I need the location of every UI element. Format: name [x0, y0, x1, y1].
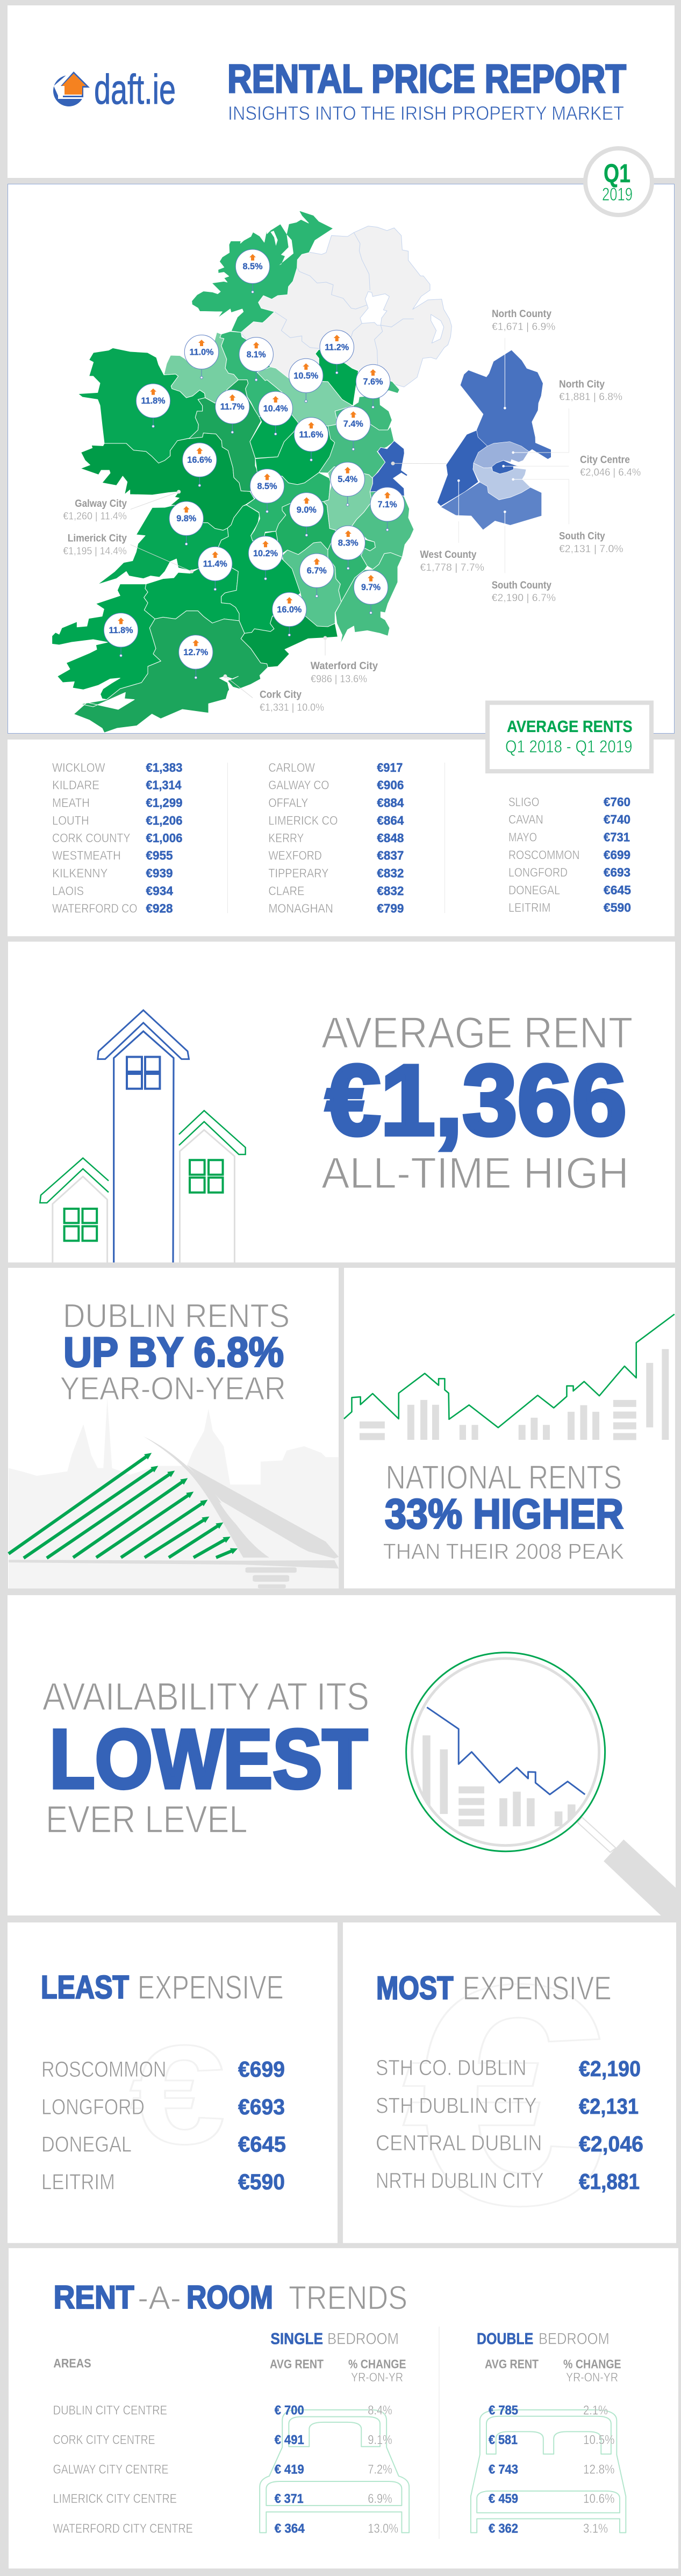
table column 1: LOUTH — [52, 813, 89, 827]
table rows: rent-a-room by city — [53, 2403, 614, 2536]
illustration: Dublin skyline — [9, 1398, 339, 1588]
icon: euro watermark: € — [402, 1919, 608, 2270]
table column 1: €1,006 — [146, 831, 183, 845]
map bubbles: percentage change by county: 11.8% — [141, 396, 166, 406]
table rows: rent-a-room by city: 10.6% — [583, 2492, 614, 2506]
table column 1: €1,383 — [146, 760, 183, 774]
map bubbles: percentage change by county: 10.4% — [263, 403, 288, 414]
table column 1: MEATH — [52, 795, 90, 809]
map labels: cities and Dublin areas: €1,260 | 11.4% — [63, 511, 127, 522]
inset: City Centre — [492, 461, 520, 474]
list: least expensive areas: LEITRIM — [41, 2169, 115, 2194]
table header: double bedroom: DOUBLE — [477, 2330, 533, 2348]
icon: single bed outline — [260, 2410, 409, 2532]
table rows: rent-a-room by city: DUBLIN CITY CENTRE — [53, 2403, 167, 2418]
table column 2: LIMERICK CO — [268, 813, 338, 827]
map bubbles: percentage change by county: 10.5% — [293, 371, 318, 381]
map bubbles: percentage change by county: 12.7% — [183, 647, 208, 657]
table column 2: TIPPERARY — [268, 866, 328, 880]
map bubbles: percentage change by county: 11.8% — [109, 625, 133, 635]
table column 1: WESTMEATH — [52, 849, 121, 863]
list: least expensive areas: DONEGAL — [41, 2132, 132, 2157]
badge: Q1 2019: 2019 — [602, 184, 633, 205]
table column 2: €917 — [377, 760, 403, 774]
table column 3: €760 — [604, 795, 630, 809]
text: lowest: LOWEST — [49, 1712, 368, 1806]
table rows: rent-a-room by city: 3.1% — [583, 2521, 608, 2536]
table column 1: €955 — [146, 849, 173, 863]
map labels: cities and Dublin areas: South City — [559, 531, 605, 542]
list: most expensive areas: STH DUBLIN CITY — [376, 2093, 537, 2118]
list: most expensive areas: NRTH DUBLIN CITY — [376, 2168, 544, 2193]
map bubbles: percentage change by county: 10.2% — [253, 548, 278, 558]
table rows: rent-a-room by city: € 700 — [275, 2403, 304, 2418]
table column 3: €645 — [604, 883, 631, 897]
heading: rent-a-room trends: -A- — [138, 2279, 181, 2316]
map labels: cities and Dublin areas — [63, 308, 641, 714]
table column 2: €906 — [377, 778, 404, 792]
map labels: cities and Dublin areas: Limerick City — [68, 533, 127, 544]
table column 3: DONEGAL — [508, 883, 560, 897]
map labels: cities and Dublin areas: North County — [492, 308, 551, 320]
map labels: cities and Dublin areas: €1,195 | 14.4% — [63, 546, 127, 557]
table column 3: CAVAN — [508, 813, 543, 827]
table column 1: WICKLOW — [52, 760, 105, 774]
table rows: rent-a-room by city: CORK CITY CENTRE — [53, 2433, 155, 2447]
table column 2: GALWAY CO — [268, 778, 329, 792]
left house — [40, 1158, 109, 1262]
table column 3 — [508, 795, 631, 915]
table rows: rent-a-room by city: LIMERICK CITY CENTRE — [53, 2492, 177, 2506]
map bubbles: percentage change by county: 16.6% — [187, 455, 212, 465]
table column 2: €832 — [377, 884, 404, 898]
heading: least expensive — [41, 1969, 284, 2006]
map: Mayo — [78, 348, 205, 463]
list: least expensive areas: LONGFORD — [41, 2094, 145, 2119]
table column 1: €928 — [146, 901, 173, 915]
map labels: cities and Dublin areas: €2,131 | 7.0% — [559, 543, 623, 555]
map bubbles: percentage change by county: 11.2% — [325, 342, 349, 353]
text: national rents: NATIONAL RENTS — [386, 1459, 622, 1496]
table column 2: KERRY — [268, 831, 304, 845]
table header: single bedroom: BEDROOM — [327, 2330, 399, 2348]
list: least expensive areas: €645 — [238, 2132, 286, 2157]
table column 2: €799 — [377, 901, 404, 915]
table column 1: CORK COUNTY — [52, 831, 130, 845]
table rows: rent-a-room by city: € 491 — [275, 2433, 304, 2447]
table rows: rent-a-room by city: WATERFORD CITY CENTRE — [53, 2521, 193, 2536]
text: year-on-year: YEAR-ON-YEAR — [60, 1370, 286, 1407]
text: Dublin rents: DUBLIN RENTS — [63, 1297, 290, 1334]
panel: average rents table — [8, 740, 675, 936]
table rows: rent-a-room by city: 2.1% — [583, 2403, 608, 2418]
icon: euro watermark: € — [130, 2016, 226, 2173]
table column 3: SLIGO — [508, 795, 539, 809]
table column headers: % CHANGE — [563, 2357, 621, 2371]
map bubbles: percentage change by county: 7.1% — [378, 499, 397, 510]
inset: North County — [461, 350, 551, 459]
table rows: rent-a-room by city: GALWAY CITY CENTRE — [53, 2462, 168, 2477]
map bubbles: percentage change by county: 8.3% — [338, 537, 359, 548]
list: most expensive areas: €1,881 — [579, 2169, 640, 2194]
table rows: rent-a-room by city: 9.1% — [368, 2433, 392, 2447]
table column 3: €693 — [604, 865, 630, 879]
map: Northern Ireland — [241, 226, 451, 387]
table column 2: CARLOW — [268, 760, 315, 774]
inset: West County — [437, 430, 488, 506]
table column 1: KILDARE — [52, 778, 99, 792]
table header: double bedroom — [477, 2330, 610, 2348]
heading: rent-a-room trends — [54, 2279, 407, 2316]
table column 1: €1,206 — [146, 813, 183, 827]
table column 2: OFFALY — [268, 795, 308, 809]
heading: rent-a-room trends: ROOM — [187, 2279, 273, 2315]
badge: Q1 2019 — [585, 148, 652, 215]
list: most expensive areas: CENTRAL DUBLIN — [376, 2130, 542, 2155]
list: most expensive areas: STH CO. DUBLIN — [376, 2055, 526, 2080]
map bubbles: percentage change by county: 6.7% — [307, 565, 327, 576]
list: most expensive areas: €2,190 — [579, 2056, 641, 2081]
illustration: Samuel Beckett bridge — [9, 1437, 339, 1588]
map: Donegal and northern counties — [192, 211, 333, 332]
table column 1: LAOIS — [52, 884, 84, 898]
table column 1: €934 — [146, 884, 173, 898]
map labels: cities and Dublin areas: Cork City — [260, 689, 302, 700]
text: than their 2008 peak: THAN THEIR 2008 PEAK — [383, 1539, 624, 1563]
text: average rent: AVERAGE RENT — [321, 1008, 633, 1057]
map bubbles: percentage change by county: 8.5% — [257, 481, 277, 491]
list: least expensive areas: €590 — [238, 2169, 285, 2194]
heading: most expensive — [376, 1970, 612, 2007]
table rows: rent-a-room by city: € 419 — [275, 2462, 304, 2477]
map bubbles: percentage change by county: 9.0% — [297, 505, 317, 515]
table rows: rent-a-room by city: € 362 — [489, 2521, 518, 2536]
heading: rent-a-room trends: RENT — [54, 2279, 134, 2315]
panel: least expensive — [8, 1922, 338, 2243]
map labels: cities and Dublin areas: West County — [420, 549, 477, 561]
table column 2: €832 — [377, 866, 404, 880]
table column 1: €939 — [146, 866, 173, 880]
table column 1 — [52, 760, 183, 915]
panel: national rents — [344, 1268, 675, 1589]
panel: most expensive — [343, 1919, 676, 2270]
inset: leader lines — [457, 338, 569, 573]
icon: magnifying glass — [406, 1653, 677, 1915]
table rows: rent-a-room by city: € 581 — [489, 2433, 518, 2447]
table rows: rent-a-room by city: € 371 — [275, 2492, 304, 2506]
table column headers: AVG RENT — [270, 2357, 324, 2371]
callout: average rents heading: AVERAGE RENTS — [507, 717, 633, 736]
map labels: cities and Dublin areas: North City — [559, 379, 605, 390]
table header: single bedroom: SINGLE — [270, 2330, 323, 2348]
table column 2: €848 — [377, 831, 404, 845]
table column 2: €864 — [377, 813, 404, 827]
panel: map — [8, 184, 674, 733]
map bubbles: percentage change by county: 9.7% — [361, 582, 381, 592]
map labels: cities and Dublin areas: City Centre — [580, 455, 630, 466]
panel: Dublin rents — [8, 1268, 339, 1589]
subtitle: INSIGHTS INTO THE IRISH PROPERTY MARKET — [228, 102, 624, 124]
table column 3: ROSCOMMON — [508, 848, 579, 862]
map labels: cities and Dublin areas: Waterford City — [311, 661, 378, 672]
table column 2: MONAGHAN — [268, 901, 333, 915]
table header: single bedroom — [270, 2330, 399, 2348]
list: most expensive areas: €2,131 — [579, 2094, 639, 2119]
figure: 1,366: €1,366 — [326, 1045, 627, 1156]
table column 3: €740 — [604, 813, 630, 827]
map labels: cities and Dublin areas: €1,671 | 6.9% — [492, 321, 555, 333]
right house — [179, 1110, 246, 1262]
table column 2 — [268, 760, 404, 915]
map labels: cities and Dublin areas: €1,881 | 6.8% — [559, 391, 622, 403]
table header: double bedroom: BEDROOM — [539, 2330, 610, 2348]
list: least expensive areas: ROSCOMMON — [41, 2057, 167, 2082]
table rows: rent-a-room by city: 13.0% — [368, 2521, 398, 2536]
logo: daft.ie: daft.ie — [94, 66, 176, 113]
list: least expensive areas — [41, 2057, 286, 2194]
map bubbles: percentage change by county — [104, 249, 404, 679]
list: least expensive areas: €699 — [238, 2057, 285, 2082]
title: RENTAL PRICE REPORT — [227, 56, 626, 101]
map labels: cities and Dublin areas: South County — [492, 580, 551, 591]
table column 3: MAYO — [508, 830, 537, 844]
map labels: cities and Dublin areas: €1,331 | 10.0% — [260, 702, 324, 714]
list: most expensive areas: €2,046 — [579, 2132, 643, 2156]
table rows: rent-a-room by city: 12.8% — [583, 2462, 614, 2477]
map bubbles: percentage change by county: 11.4% — [203, 559, 227, 569]
table rows: rent-a-room by city: € 743 — [489, 2462, 518, 2477]
arrows: rising rents — [9, 1456, 233, 1558]
table rows: rent-a-room by city: 7.2% — [368, 2462, 392, 2477]
panel: header — [8, 5, 675, 178]
heading: rent-a-room trends: TRENDS — [289, 2279, 407, 2316]
table column headers: % CHANGE — [348, 2357, 406, 2371]
map bubbles: percentage change by county: 5.4% — [338, 474, 357, 484]
map bubbles: percentage change by county: 7.6% — [363, 376, 383, 387]
panel: rent-a-room trends — [9, 2248, 678, 2568]
heading: least expensive: LEAST — [41, 1969, 129, 2005]
inset: South City — [473, 463, 531, 500]
inset: North City — [474, 442, 529, 468]
table column 1: €1,314 — [146, 778, 182, 792]
text: up by 6.8%: UP BY 6.8% — [63, 1329, 284, 1376]
text: 33% higher: 33% HIGHER — [385, 1490, 623, 1537]
dividers — [227, 763, 445, 913]
table column 1: KILKENNY — [52, 866, 107, 880]
table column headers: AREAS — [53, 2356, 91, 2370]
table column 1: €1,299 — [146, 795, 183, 809]
map: Galway, Limerick, Waterford, Cork and Dublin city callouts — [131, 462, 447, 698]
table column headers: YR-ON-YR — [351, 2370, 403, 2384]
table column headers: AVG RENT — [485, 2357, 539, 2371]
table column 3: LEITRIM — [508, 901, 550, 915]
map labels: cities and Dublin areas: Galway City — [75, 498, 127, 510]
table column 1: WATERFORD CO — [52, 901, 137, 915]
text: availability at its: AVAILABILITY AT ITS — [42, 1675, 369, 1718]
table rows: rent-a-room by city: 8.4% — [368, 2403, 392, 2418]
table rows: rent-a-room by city: € 364 — [275, 2521, 305, 2536]
text: ever level: EVER LEVEL — [46, 1799, 248, 1841]
table rows: rent-a-room by city: € 459 — [489, 2492, 518, 2506]
table column 2: €884 — [377, 795, 404, 809]
table column 3: €731 — [604, 830, 630, 844]
map: Dublin inset — [437, 338, 569, 573]
map bubbles: percentage change by county: 11.0% — [189, 347, 214, 357]
tall house — [98, 1010, 189, 1262]
map bubbles: percentage change by county: 8.5% — [243, 261, 262, 271]
table column 3: €590 — [604, 901, 631, 915]
icon: double bed outline — [471, 2410, 626, 2532]
map bubbles: percentage change by county: 9.8% — [176, 513, 196, 523]
heading: most expensive: EXPENSIVE — [463, 1970, 612, 2007]
table column headers: YR-ON-YR — [566, 2370, 618, 2384]
badge: Q1 2019: Q1 — [604, 160, 630, 188]
callout: average rents heading — [488, 703, 651, 771]
map labels: cities and Dublin areas: €986 | 13.6% — [311, 673, 367, 685]
map bubbles: percentage change by county: 11.7% — [220, 401, 245, 412]
logo: daft.ie — [53, 66, 176, 113]
icon: houses — [40, 1010, 246, 1262]
divider — [439, 2327, 440, 2539]
table column 2: WEXFORD — [268, 849, 322, 863]
table rows: rent-a-room by city: 10.5% — [583, 2433, 614, 2447]
map labels: cities and Dublin areas: €2,046 | 6.4% — [580, 467, 641, 478]
heading: least expensive: EXPENSIVE — [138, 1969, 284, 2006]
map labels: cities and Dublin areas: €2,190 | 6.7% — [492, 592, 556, 604]
map labels: cities and Dublin areas: €1,778 | 7.7% — [420, 562, 484, 573]
list: least expensive areas: €693 — [238, 2094, 285, 2119]
chart: skyline bars and rent line — [344, 1314, 675, 1440]
inset: South County — [441, 482, 542, 530]
map bubbles: percentage change by county: 7.4% — [343, 419, 363, 429]
callout: average rents heading: Q1 2018 - Q1 2019 — [505, 737, 632, 756]
table column 2: €837 — [377, 849, 404, 863]
table column 2: CLARE — [268, 884, 304, 898]
table column 3: LONGFORD — [508, 865, 568, 879]
table rows: rent-a-room by city: 6.9% — [368, 2492, 392, 2506]
map bubbles: percentage change by county: 16.0% — [277, 604, 302, 615]
panel: average rent all-time high — [8, 942, 675, 1262]
map bubbles: percentage change by county: 8.1% — [247, 349, 266, 360]
map: county fills — [52, 332, 414, 733]
panel: availability — [8, 1595, 677, 1915]
table column headers — [53, 2356, 621, 2384]
table rows: rent-a-room by city: € 785 — [489, 2403, 518, 2418]
map bubbles: percentage change by county: 11.6% — [299, 429, 324, 440]
text: all-time high: ALL-TIME HIGH — [321, 1149, 629, 1198]
list: most expensive areas — [376, 2055, 643, 2194]
heading: most expensive: MOST — [376, 1970, 453, 2006]
table column 3: €699 — [604, 848, 630, 862]
